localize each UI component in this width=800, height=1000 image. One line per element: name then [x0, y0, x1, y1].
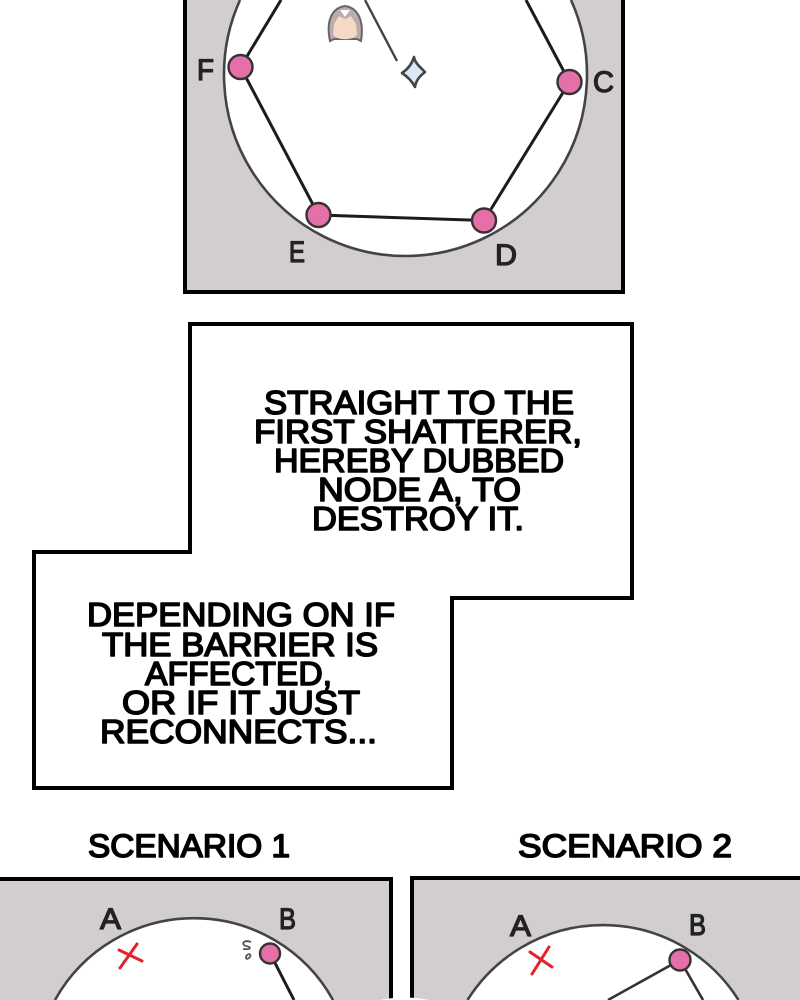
label A: A	[100, 903, 121, 936]
caption: straight to the first shatterer	[254, 384, 582, 537]
line toward crystal	[365, 0, 397, 61]
heading: scenario 2: SCENARIO 2	[518, 828, 732, 864]
caption: depending on if the barrier is affected	[87, 596, 395, 750]
icon: red cross at node A	[119, 944, 142, 968]
label B: B	[689, 909, 706, 942]
node C	[558, 70, 582, 94]
caption: straight to the first shatterer: NODE A, TO	[318, 471, 521, 508]
barrier circle	[224, 0, 587, 256]
icon: debris marks	[243, 941, 251, 959]
caption: depending on if the barrier is affected: DEPENDING ON IF	[87, 596, 395, 633]
label D: D	[495, 239, 517, 272]
caption: depending on if the barrier is affected: OR IF IT JUST	[122, 684, 360, 721]
label E: E	[289, 236, 305, 269]
node F	[228, 55, 252, 79]
edge from node B	[275, 963, 294, 1000]
caption: straight to the first shatterer: HEREBY DUBBED	[274, 442, 564, 479]
label F: F	[197, 54, 214, 87]
label B: B	[279, 903, 296, 936]
node E	[306, 203, 330, 227]
panel: scenario 2 diagram	[412, 878, 800, 1000]
caption: straight to the first shatterer: FIRST SHATTERER,	[254, 413, 582, 450]
panel: hexagon barrier diagram	[185, 0, 623, 292]
barrier circle	[468, 925, 738, 1000]
label C: C	[593, 66, 614, 99]
node B	[670, 950, 690, 970]
node D	[472, 208, 496, 232]
edges from node B	[608, 960, 703, 1000]
icon: crystal	[402, 57, 425, 87]
label A: A	[510, 910, 531, 943]
caption: depending on if the barrier is affected: AFFECTED,	[145, 655, 332, 692]
white speech bubble edge at bottom	[380, 998, 429, 1000]
node B	[260, 944, 280, 964]
hexagon edges	[240, 0, 570, 220]
caption: depending on if the barrier is affected: THE BARRIER IS	[102, 626, 378, 663]
caption: depending on if the barrier is affected: RECONNECTS...	[100, 713, 377, 750]
barrier circle	[55, 918, 333, 1000]
panel: scenario 1 diagram	[0, 879, 391, 1000]
panel: stepped caption box	[34, 324, 632, 788]
caption: straight to the first shatterer: DESTROY IT.	[312, 500, 524, 537]
caption: straight to the first shatterer: STRAIGHT TO THE	[264, 384, 574, 421]
heading: scenario 1: SCENARIO 1	[88, 828, 290, 864]
icon: character head	[329, 6, 362, 41]
icon: red cross at node A	[530, 947, 552, 974]
